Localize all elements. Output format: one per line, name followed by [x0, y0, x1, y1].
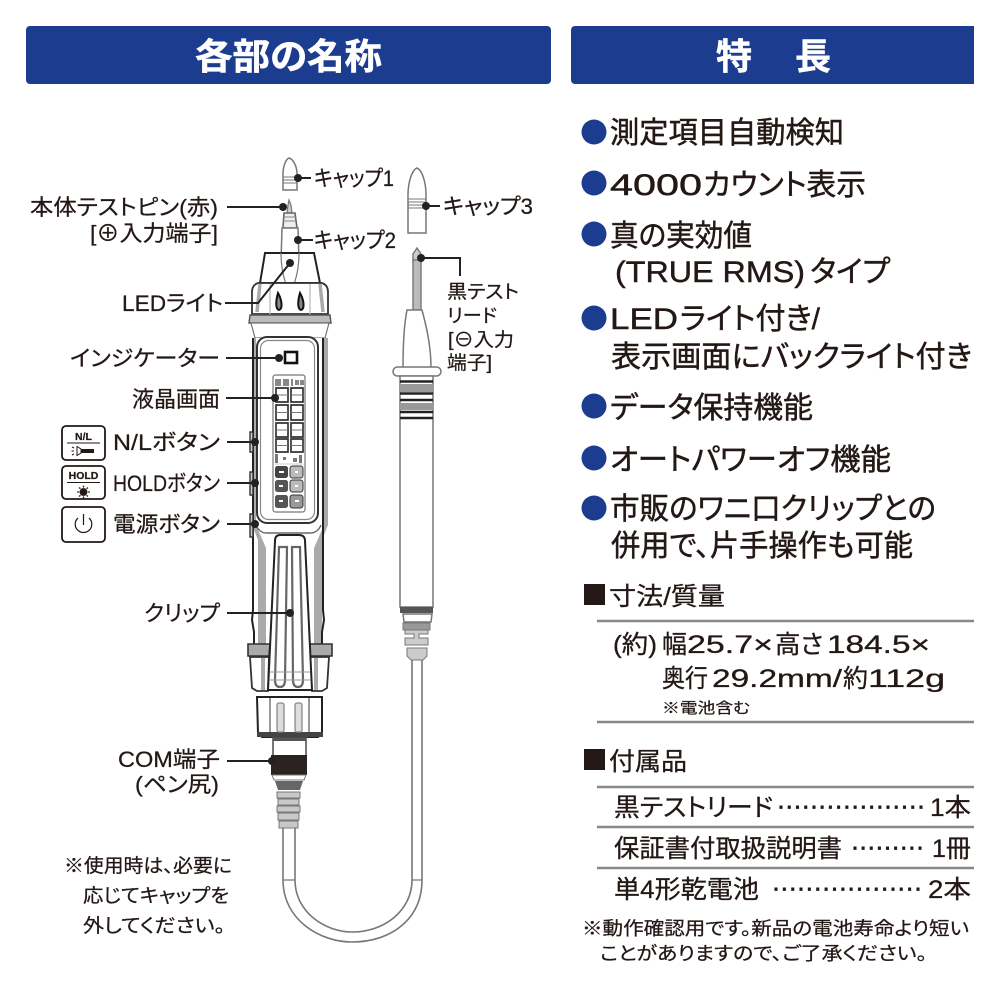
label: black test lead: [⊖入力 [448, 329, 514, 351]
diagram: tester body [248, 200, 332, 828]
accessory: black test lead [614, 793, 971, 822]
note: battery [582, 918, 969, 964]
label: main test pin: [⊕入力端子] [90, 221, 218, 246]
section: dimensions and weight: 幅 [662, 631, 687, 659]
feature: 4000 count: 4000 [610, 169, 702, 202]
feature: LED and backlight [582, 303, 972, 374]
accessory: manual [614, 834, 971, 863]
LCD [273, 375, 305, 512]
feature: LED and backlight: ライト付き/ [680, 303, 821, 336]
label: black test lead: 黒テスト [447, 282, 519, 303]
label: clip: クリップ [144, 601, 220, 626]
accessory: black test lead: 1本 [930, 794, 971, 822]
main barrel [254, 338, 323, 650]
label: N/L button: N/Lボタン [113, 430, 220, 455]
feature: true RMS: タイプ [810, 256, 891, 289]
section: dimensions and weight [584, 583, 974, 722]
label: cap 1: キャップ1 [314, 166, 394, 191]
indicator [285, 352, 297, 363]
section: accessories [584, 748, 974, 904]
icon: N/L button [62, 426, 105, 460]
feature: auto power off: オートパワーオフ機能 [610, 444, 891, 477]
section: accessories: 付属品 [609, 748, 687, 776]
section: dimensions and weight: 奥行 [662, 665, 708, 693]
icon: HOLD button: ☀ [77, 485, 90, 500]
feature: 4000 count [582, 169, 866, 202]
heading: features: 特 [716, 36, 752, 77]
label: main test pin [30, 195, 218, 246]
label: COM terminal: COM端子 [118, 747, 220, 772]
accessory: manual: 保証書付取扱説明書 [614, 835, 842, 863]
feature: auto detect: 測定項目自動検知 [610, 117, 844, 150]
accessory: AAA batteries: ·················· [772, 875, 922, 902]
section: dimensions and weight: 高さ [775, 631, 823, 659]
icon: HOLD button: HOLD [69, 470, 99, 482]
label: HOLD button: HOLDボタン [113, 471, 220, 496]
heading: parts names: 各部の名称 [195, 36, 382, 77]
feature: 4000 count: カウント表示 [703, 169, 866, 202]
icon: power button [62, 507, 105, 542]
lower body [248, 644, 332, 656]
accessory: AAA batteries: 2本 [928, 876, 971, 904]
feature: true RMS: (TRUE RMS) [615, 256, 805, 289]
label: main test pin: 本体テストピン(赤) [30, 195, 218, 220]
side buttons [250, 432, 253, 537]
feature: LED and backlight: LED [610, 303, 678, 336]
label: LCD screen: 液晶画面 [132, 387, 220, 412]
note: remove caps [64, 855, 232, 937]
label: COM terminal [118, 747, 220, 797]
label: black test lead: リード [447, 306, 497, 327]
icon: N/L button: N/L [75, 431, 93, 443]
heading: features: 長 [795, 36, 831, 77]
note: remove caps: 応じてキャップを [83, 885, 229, 907]
feature: LED and backlight: 表示画面にバックライト付き [611, 341, 972, 374]
heading: features [571, 26, 974, 84]
heading: parts names [26, 26, 551, 84]
label: black test lead [447, 282, 519, 374]
diagram: cable [283, 655, 422, 942]
section: dimensions and weight: 寸法/質量 [609, 583, 725, 611]
diagram: cap 3 [408, 168, 426, 233]
leader lines and dots [225, 174, 460, 765]
label: cap 3: キャップ3 [443, 194, 533, 219]
diagram: cap 1 [283, 158, 297, 190]
note: remove caps: ※使用時は、必要に [64, 855, 232, 877]
section: dimensions and weight: ※電池含む [662, 700, 750, 717]
feature: data hold: データ保持機能 [610, 392, 813, 425]
note: battery: ことがありますので、ご了承ください。 [600, 943, 927, 964]
section: dimensions and weight: 112g [868, 665, 945, 693]
note: battery: ※動作確認用です。新品の電池寿命より短い [582, 918, 969, 939]
feature: alligator clip [582, 493, 936, 563]
accessory: black test lead: ·················· [777, 793, 925, 820]
accessory: manual: 1冊 [932, 835, 971, 863]
label: power button: 電源ボタン [113, 512, 220, 537]
section: dimensions and weight: 約 [843, 665, 868, 693]
head [260, 253, 320, 283]
section: dimensions and weight: 184.5× [827, 631, 930, 659]
label: cap 2: キャップ2 [314, 228, 396, 253]
note: remove caps: 外してください。 [83, 915, 225, 937]
feature: alligator clip: 併用で、片手操作も可能 [611, 530, 913, 563]
section: dimensions and weight: (約) [613, 631, 657, 659]
diagram: black test lead probe [393, 248, 441, 660]
COM terminal [271, 738, 307, 828]
feature list [582, 117, 972, 563]
feature: true RMS: 真の実効値 [610, 220, 752, 253]
section: dimensions and weight: 29.2mm/ [712, 665, 842, 693]
accessory: manual: ········· [851, 834, 924, 861]
feature: true RMS [582, 220, 891, 289]
accessory: AAA batteries [614, 875, 971, 904]
accessory: AAA batteries: 単4形乾電池 [614, 876, 759, 904]
label: LED light: LEDライト [122, 291, 223, 316]
label: black test lead: 端子] [447, 352, 492, 374]
icon: HOLD button [62, 466, 105, 500]
clip [268, 535, 312, 690]
probe pin [281, 200, 299, 262]
feature: alligator clip: 市販のワニ口クリップとの [610, 493, 936, 526]
section: dimensions and weight: 25.7× [687, 631, 773, 659]
label: COM terminal: (ペン尻) [135, 772, 219, 797]
accessory: black test lead: 黒テストリード [614, 794, 773, 822]
display bezel [257, 337, 318, 523]
label: indicator: インジケーター [70, 346, 220, 371]
